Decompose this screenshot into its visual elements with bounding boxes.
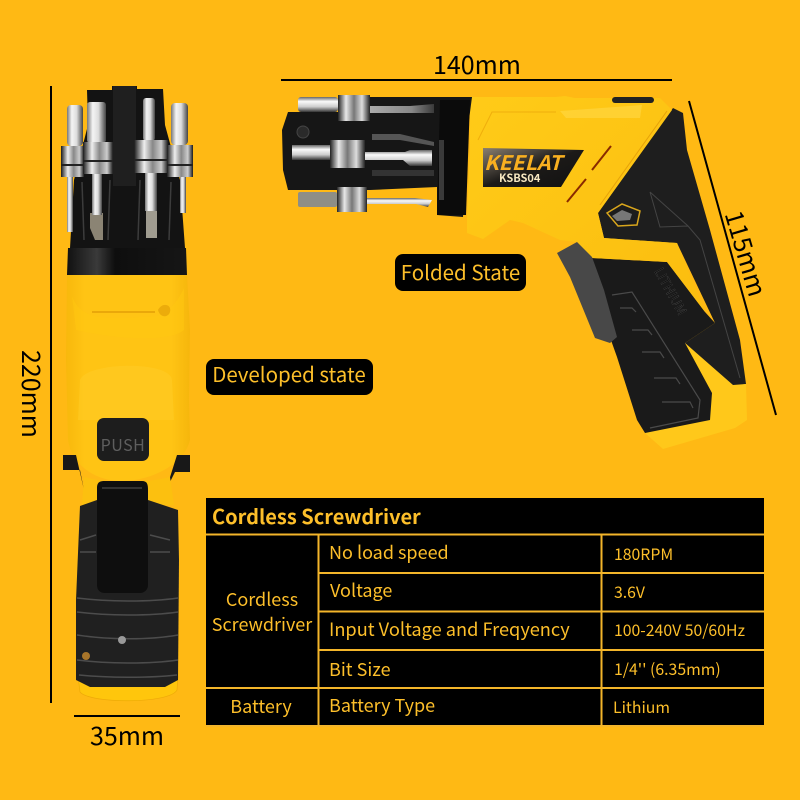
row: Battery Type: Battery Type (329, 692, 435, 718)
row: Input Voltage and Freqyency: Input Voltage and Freqyency (329, 616, 570, 642)
row: Input Voltage and Freqyency: 100-240V 50/60Hz (614, 618, 745, 641)
yellow body (467, 96, 705, 312)
row: Voltage (330, 577, 646, 603)
fold button (607, 204, 640, 226)
screwdriver: developed state (61, 86, 193, 701)
row: Bit Size: Bit Size (329, 656, 391, 682)
trigger (557, 242, 617, 343)
grip screw (118, 636, 126, 644)
row: Voltage: 3.6V (614, 580, 646, 603)
model badge: KEELAT (484, 147, 566, 176)
vent slots (567, 146, 611, 202)
row group label: Cordless Screwdriver (212, 586, 313, 637)
side tabs (63, 455, 190, 490)
model badge (483, 147, 584, 187)
black collar (67, 248, 187, 275)
dimension: 115mm height (689, 101, 776, 415)
bit: second (83, 102, 113, 240)
bit: fourth (167, 103, 193, 213)
grip neck (82, 477, 174, 505)
hub top and post (70, 86, 185, 248)
row: Input Voltage and Freqyency (329, 616, 745, 642)
screwdriver: folded state (282, 95, 747, 449)
PUSH button (97, 418, 149, 461)
row: Battery Type: Lithium (613, 695, 670, 718)
trigger clip (97, 481, 148, 593)
row group label: Cordless Screwdriver: Cordless (226, 586, 298, 612)
row group label: Cordless Screwdriver: Screwdriver (212, 611, 313, 637)
LITHIUM mark: LITHIUM (651, 264, 692, 318)
black neck and bit holder (282, 97, 472, 217)
specification table (206, 498, 764, 726)
yellow body (66, 275, 190, 481)
dimension: 35mm width (74, 716, 180, 753)
yellow lower shell (645, 343, 747, 449)
row: Bit Size: 1/4'' (6.35mm) (614, 657, 721, 680)
dimension: 115mm height: 115mm (717, 206, 776, 300)
dimension: 140mm length: 140mm (433, 46, 521, 82)
table title: Cordless Screwdriver (212, 501, 421, 530)
model badge: KSBS04 (499, 170, 541, 186)
black rear grip shell (598, 108, 746, 386)
yellow base (78, 676, 178, 701)
bit: bottom (298, 187, 432, 212)
row: Voltage: Voltage (330, 577, 392, 603)
bit: top (298, 95, 434, 121)
table grid (206, 534, 764, 726)
dimension: 35mm width: 35mm (90, 717, 164, 753)
row: Battery Type (329, 692, 670, 718)
PUSH button: PUSH (101, 432, 145, 456)
row: No load speed: 180RPM (614, 542, 673, 565)
row: No load speed (329, 539, 673, 565)
row: Bit Size (329, 656, 721, 682)
row group label: Battery: Battery (230, 693, 292, 719)
bit: far left (61, 105, 84, 232)
label: Developed state: Developed state (212, 358, 366, 388)
bit: third (134, 98, 168, 238)
bit: middle (292, 140, 432, 168)
row: No load speed: No load speed (329, 539, 449, 565)
label: Folded State: Folded State (401, 256, 520, 286)
black lower grip (592, 258, 715, 433)
dimension: 220mm height: 220mm (14, 350, 50, 438)
black grip (76, 500, 179, 687)
